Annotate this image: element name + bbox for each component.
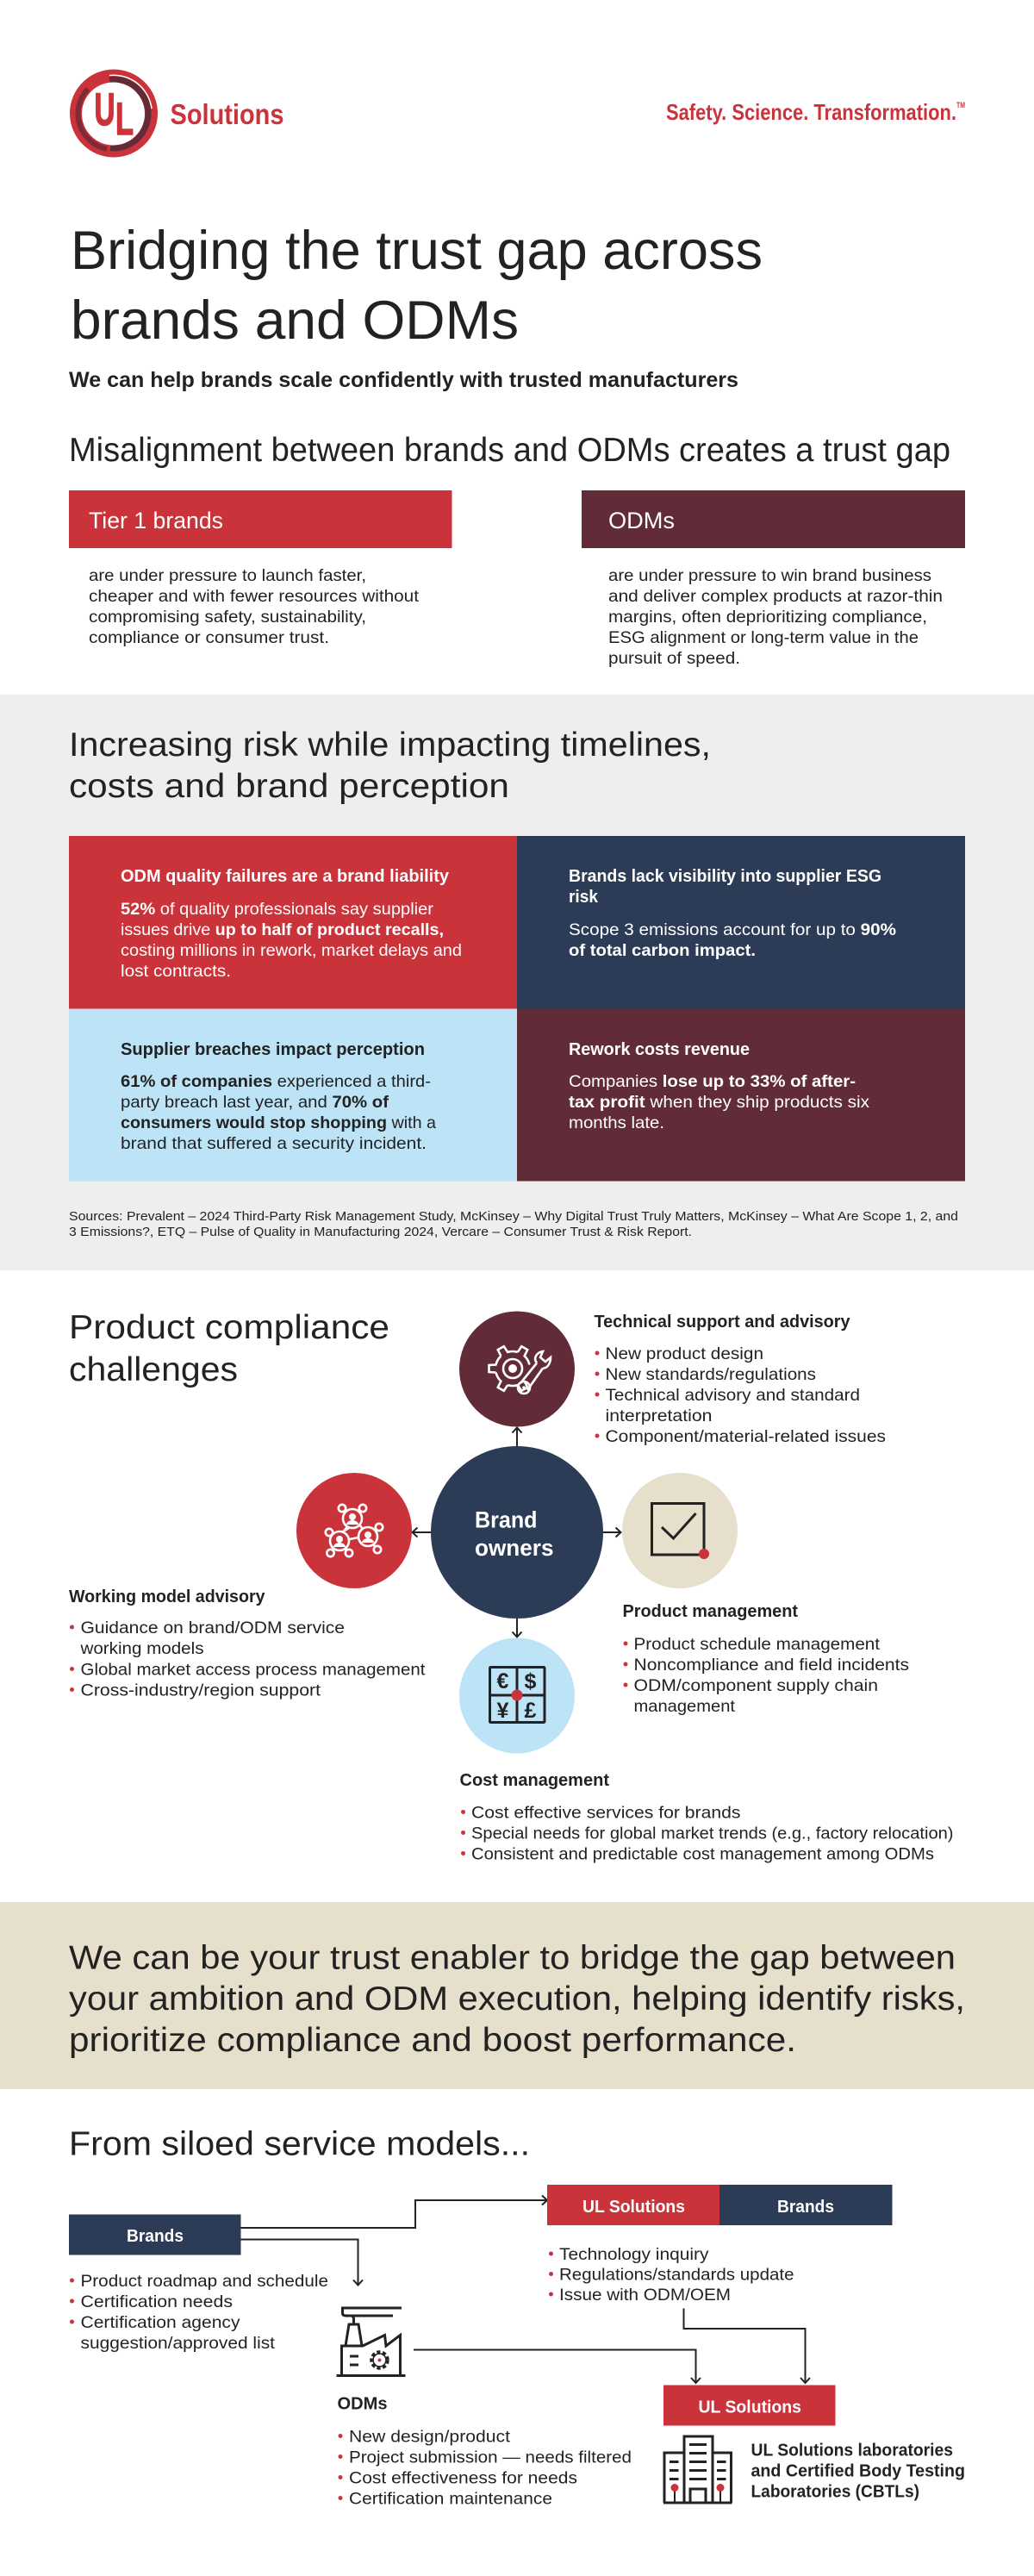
text: technical support and advisory: Technical advisory and standard	[605, 1386, 860, 1405]
text: product management: Noncompliance and field incidents	[634, 1656, 909, 1675]
text: laboratories	[751, 2441, 965, 2501]
card: supplier breaches: consumers would stop shopping with a	[121, 1113, 436, 1132]
card: rework costs: tax profit when they ship products six	[569, 1093, 869, 1112]
text: technical support and advisory: interpretation	[605, 1407, 712, 1425]
text: technical support and advisory: New standards/regulations	[605, 1365, 816, 1384]
list: brands needs: Certification needs	[81, 2292, 233, 2311]
card: rework costs: Rework costs revenue	[569, 1040, 750, 1059]
card: supplier ESG risk: risk	[569, 888, 599, 907]
text: cost management: Cost management	[460, 1771, 609, 1790]
text: cost management: Special needs for global market trends (e.g., factory relocation)	[471, 1824, 953, 1843]
tagline: TM	[956, 101, 965, 109]
title: brands and ODMs	[71, 290, 519, 351]
card: ODM quality failures: issues drive up to half of product recalls,	[121, 920, 444, 939]
heading: product compliance challenges: challenges	[69, 1351, 238, 1388]
box: UL Solutions: UL Solutions	[698, 2398, 801, 2417]
arrow: UL and Brands to UL Solutions	[684, 2308, 810, 2383]
card: supplier breaches	[69, 1008, 517, 1181]
banner: ODMs: ODMs	[608, 508, 675, 533]
card: supplier breaches: Supplier breaches impact perception	[121, 1040, 425, 1059]
card: rework costs	[517, 1008, 965, 1181]
heading: increasing risk: Increasing risk while impacting timelines,	[69, 727, 711, 764]
text: technical support and advisory	[595, 1313, 886, 1446]
text: brands pressure: compliance or consumer trust.	[89, 628, 329, 647]
text: product management: Product schedule management	[634, 1635, 881, 1654]
list: technology inquiry	[549, 2245, 794, 2305]
text: laboratories: and Certified Body Testing	[751, 2461, 965, 2480]
panel: trust enabler statement: prioritize compliance and boost performance.	[69, 2022, 796, 2059]
text: technical support and advisory: New product design	[605, 1344, 763, 1363]
arrow: Brands to ODMs	[241, 2239, 363, 2286]
text: sources: 3 Emissions?, ETQ – Pulse of Quality in Manufacturing 2024, Vercare – Consumer Trust & Risk Report.	[69, 1225, 692, 1239]
text: laboratories: UL Solutions laboratories	[751, 2441, 953, 2460]
list: ODMs	[338, 2394, 632, 2508]
card: ODM quality failures: costing millions in rework, market delays and	[121, 941, 462, 960]
card: ODM quality failures: 52% of quality professionals say supplier	[121, 900, 434, 919]
icon: currency grid: ¥	[497, 1699, 509, 1723]
text: working model advisory: Global market access process management	[81, 1660, 426, 1679]
list: technology inquiry: Issue with ODM/OEM	[559, 2286, 731, 2305]
text: sources: Sources: Prevalent – 2024 Third-Party Risk Management Study, McKinsey – Why Digital Trust Truly Matters, McKinsey – What Are Scope 1, 2, and	[69, 1209, 958, 1224]
card: supplier breaches: party breach last year, and 70% of	[121, 1093, 389, 1112]
heading: product compliance challenges	[69, 1309, 389, 1388]
circle: brand owners: owners	[475, 1535, 553, 1561]
text: working model advisory: working models	[79, 1639, 204, 1658]
banner: Tier 1 brands	[69, 490, 452, 548]
text: working model advisory: Cross-industry/region support	[81, 1681, 321, 1700]
card: ODM quality failures: lost contracts.	[121, 962, 231, 981]
card: rework costs: months late.	[569, 1113, 664, 1132]
card: ODM quality failures: ODM quality failures are a brand liability	[121, 867, 450, 886]
text: technical support and advisory: Technical support and advisory	[595, 1313, 850, 1332]
card: supplier breaches: brand that suffered a security incident.	[121, 1134, 427, 1153]
text: sources	[69, 1209, 958, 1239]
text: working model advisory	[69, 1587, 426, 1700]
card: ODM quality failures	[69, 836, 517, 1008]
logo: UL Solutions: L	[115, 94, 134, 145]
text: product management: Product management	[622, 1602, 798, 1621]
icon: network of people	[296, 1473, 412, 1588]
list: brands needs: Product roadmap and schedule	[81, 2272, 328, 2291]
text: ODM pressure: are under pressure to win brand business	[608, 566, 931, 585]
card: supplier ESG risk: Brands lack visibility into supplier ESG	[569, 867, 881, 886]
title	[71, 221, 763, 351]
panel: trust enabler statement: your ambition and ODM execution, helping identify risks,	[69, 1980, 965, 2018]
circle: brand owners: Brand	[475, 1506, 538, 1532]
arrows: brand owners hub	[412, 1427, 620, 1637]
list: brands needs	[70, 2272, 328, 2353]
logo: UL Solutions	[70, 69, 284, 157]
banner: ODMs	[582, 490, 965, 548]
box: UL Solutions and Brands: UL Solutions	[582, 2198, 685, 2217]
text: brands pressure	[89, 566, 420, 647]
list: ODMs: Cost effectiveness for needs	[349, 2468, 577, 2487]
text: brands pressure: are under pressure to launch faster,	[89, 566, 366, 585]
text: cost management: Cost effective services for brands	[471, 1803, 741, 1822]
text: brands pressure: cheaper and with fewer resources without	[89, 587, 420, 606]
panel: trust enabler statement: We can be your trust enabler to bridge the gap between	[69, 1939, 956, 1977]
text: ODM pressure: ESG alignment or long-term value in the	[608, 628, 919, 647]
text: ODM pressure	[608, 566, 943, 668]
icon: currency grid: £	[525, 1699, 537, 1723]
text: laboratories: Laboratories (CBTLs)	[751, 2482, 919, 2501]
heading: increasing risk	[69, 727, 711, 805]
text: ODM pressure: and deliver complex products at razor-thin	[608, 587, 943, 606]
heading: product compliance challenges: Product compliance	[69, 1309, 389, 1346]
list: ODMs: New design/product	[349, 2427, 511, 2446]
icon: factory	[336, 2308, 405, 2375]
list: brands needs: Certification agency	[81, 2313, 240, 2332]
text: product management: ODM/component supply chain	[634, 1676, 878, 1695]
icon: currency grid: €	[497, 1669, 509, 1693]
list: technology inquiry: Regulations/standards update	[559, 2265, 794, 2284]
icon: currency grid: $	[525, 1669, 537, 1693]
text: cost management: Consistent and predictable cost management among ODMs	[471, 1844, 934, 1863]
box: UL Solutions and Brands: Brands	[777, 2198, 834, 2217]
logo: UL Solutions: U	[95, 84, 115, 135]
text: brands pressure: compromising safety, sustainability,	[89, 608, 366, 627]
logo: UL Solutions: Solutions	[171, 98, 284, 130]
panel: increasing risk	[0, 695, 1034, 1270]
list: ODMs: Certification maintenance	[349, 2489, 552, 2508]
card: supplier ESG risk: Scope 3 emissions account for up to 90%	[569, 920, 896, 939]
card: supplier breaches: 61% of companies experienced a third-	[121, 1072, 431, 1091]
text: cost management	[460, 1771, 953, 1863]
text: ODM pressure: pursuit of speed.	[608, 649, 740, 668]
list: ODMs: ODMs	[338, 2394, 388, 2413]
title: Bridging the trust gap across	[71, 221, 763, 281]
card: rework costs: Companies lose up to 33% of after-	[569, 1072, 856, 1091]
list: ODMs: Project submission — needs filtered	[349, 2448, 632, 2467]
text: working model advisory: Guidance on brand/ODM service	[81, 1619, 345, 1637]
text: technical support and advisory: Component/material-related issues	[605, 1427, 886, 1446]
box: UL Solutions	[663, 2386, 836, 2425]
icon: gear and wrench	[459, 1312, 575, 1427]
arrow: ODMs to UL Solutions	[414, 2349, 701, 2383]
box: Brands	[69, 2215, 241, 2255]
text: product management: management	[634, 1697, 736, 1716]
heading: misalignment: Misalignment between brands and ODMs creates a trust gap	[69, 432, 950, 469]
tagline: Safety. Science. Transformation.	[666, 99, 956, 125]
text: product management	[622, 1602, 909, 1716]
text: ODM pressure: margins, often deprioritizing compliance,	[608, 608, 927, 627]
card: supplier ESG risk: of total carbon impact.	[569, 941, 756, 960]
box: UL Solutions and Brands	[547, 2185, 893, 2225]
list: technology inquiry: Technology inquiry	[559, 2245, 709, 2264]
list: brands needs: suggestion/approved list	[81, 2334, 276, 2353]
box: Brands: Brands	[127, 2227, 184, 2246]
heading: from siloed service models: From siloed service models...	[69, 2125, 530, 2163]
text: working model advisory: Working model advisory	[69, 1587, 265, 1606]
icon: checkbox	[622, 1473, 738, 1588]
panel: trust enabler statement	[0, 1902, 1034, 2089]
card: supplier ESG risk	[517, 836, 965, 1008]
heading: increasing risk: costs and brand perception	[69, 768, 509, 805]
icon: currency grid	[459, 1637, 575, 1753]
icon: laboratory buildings	[663, 2436, 732, 2503]
panel: ODMs	[582, 490, 965, 668]
arrow: Brands to UL Solutions and Brands	[241, 2196, 547, 2228]
subtitle: We can help brands scale confidently with trusted manufacturers	[69, 368, 738, 392]
banner: Tier 1 brands: Tier 1 brands	[89, 508, 223, 533]
panel: Tier 1 brands	[69, 490, 452, 647]
circle: brand owners	[431, 1446, 603, 1619]
